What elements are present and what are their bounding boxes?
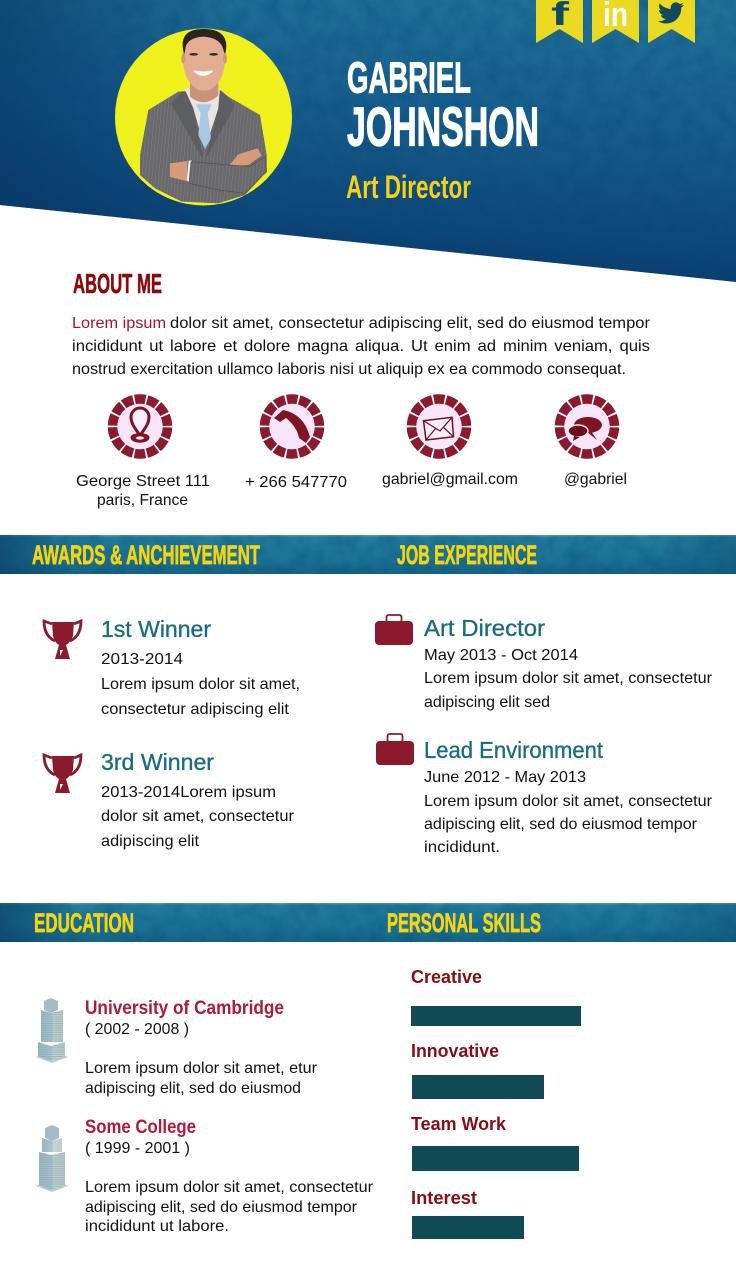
award: 3rd winner	[44, 749, 295, 850]
about me paragraph: nostrud exercitation ullamco laboris nisi ut aliquip ex ea commodo consequat.	[72, 361, 626, 378]
icon: briefcase	[375, 615, 413, 645]
contact details: @gabriel	[564, 471, 627, 488]
education: some college: ( 1999 - 2001 )	[85, 1140, 190, 1157]
about me paragraph: dolor sit amet, consectetur adipiscing elit, sed do eiusmod tempor	[170, 315, 651, 332]
ribbon: linkedin	[592, 0, 639, 43]
award: 1st winner: consectetur adipiscing elit	[101, 701, 290, 718]
education: university of cambridge: adipiscing elit, sed do eiusmod	[85, 1080, 301, 1097]
about me paragraph	[72, 315, 651, 378]
skill: creative: Creative	[411, 966, 482, 987]
job: lead environment: Lead Environment	[424, 737, 604, 763]
job: lead environment: adipiscing elit, sed do eiusmod tempor	[424, 816, 698, 833]
section band: education and personal skills	[0, 903, 736, 942]
skill: team work: Team Work	[411, 1113, 507, 1134]
education: university of cambridge	[36, 998, 318, 1097]
skill: innovative	[411, 1040, 544, 1099]
skill: interest: Interest	[411, 1187, 477, 1208]
profile photo: yellow circle with man in suit	[115, 28, 292, 206]
job: lead environment: Lorem ipsum dolor sit amet, consectetur	[424, 793, 713, 810]
icon: location	[112, 399, 168, 454]
section band: awards and job experience	[0, 535, 736, 574]
name and title	[346, 54, 539, 205]
icon: trophy	[44, 755, 81, 793]
education: some college: Lorem ipsum dolor sit amet, consectetur	[85, 1179, 374, 1196]
award: 1st winner: 1st Winner	[101, 616, 211, 642]
job: lead environment	[376, 734, 713, 856]
education: some college: Some College	[85, 1117, 196, 1138]
contact details: + 266 547770	[245, 474, 347, 491]
award: 1st winner	[44, 616, 300, 718]
section band: awards and job experience: AWARDS & ANCHIEVEMENT	[32, 540, 260, 570]
education: some college: adipiscing elit, sed do eiusmod tempor	[85, 1199, 358, 1216]
award: 1st winner: Lorem ipsum dolor sit amet,	[101, 676, 300, 693]
icon: briefcase	[376, 734, 414, 765]
social ribbons	[536, 0, 695, 43]
education: university of cambridge: Lorem ipsum dolor sit amet, etur	[85, 1060, 318, 1077]
education: some college: incididunt ut labore.	[85, 1218, 229, 1235]
education: university of cambridge: ( 2002 - 2008 )	[85, 1021, 189, 1038]
contact details: George Street 111	[76, 473, 210, 490]
icon: trophy	[44, 621, 81, 659]
contact details	[76, 471, 627, 509]
icon: chat bubbles	[560, 399, 614, 454]
ribbon: twitter	[648, 0, 695, 43]
name and title: GABRIEL	[347, 54, 471, 102]
name and title: JOHNSHON	[347, 96, 539, 158]
about me paragraph: incididunt ut labore et dolore magna aliqua. Ut enim ad minim veniam, quis	[72, 338, 650, 355]
icon: phone	[264, 399, 320, 454]
job: lead environment: June 2012 - May 2013	[424, 769, 586, 786]
ribbon: facebook	[536, 0, 583, 43]
icon: building	[36, 1125, 68, 1192]
skill: interest	[411, 1187, 524, 1239]
section band: education and personal skills: EDUCATION	[34, 908, 134, 938]
icon: building	[36, 998, 68, 1063]
section band: education and personal skills: PERSONAL SKILLS	[387, 908, 541, 938]
icon: envelope	[412, 399, 466, 454]
job: lead environment: incididunt.	[424, 839, 500, 856]
skill: creative	[411, 966, 581, 1026]
skill: team work	[411, 1113, 579, 1171]
award: 3rd winner: 3rd Winner	[101, 749, 214, 775]
job: art director	[375, 615, 713, 711]
skill: innovative: Innovative	[411, 1040, 499, 1061]
section band: awards and job experience: JOB EXPERIENCE	[397, 540, 537, 570]
about me paragraph: Lorem ipsum	[72, 315, 166, 332]
education: some college	[36, 1117, 374, 1235]
name and title: Art Director	[346, 169, 471, 205]
job: art director: Art Director	[424, 615, 545, 641]
award: 1st winner: 2013-2014	[101, 651, 183, 668]
job: art director: adipiscing elit sed	[424, 694, 550, 711]
contact details: gabriel@gmail.com	[382, 471, 518, 488]
award: 3rd winner: dolor sit amet, consectetur	[101, 808, 295, 825]
contact details: paris, France	[97, 492, 188, 509]
award: 3rd winner: adipiscing elit	[101, 833, 200, 850]
job: art director: Lorem ipsum dolor sit amet, consectetur	[424, 670, 713, 687]
job: art director: May 2013 - Oct 2014	[424, 647, 578, 664]
header banner	[0, 0, 736, 282]
heading: about me: ABOUT ME	[73, 268, 162, 299]
education: university of cambridge: University of Cambridge	[85, 998, 284, 1019]
award: 3rd winner: 2013-2014Lorem ipsum	[101, 784, 276, 801]
